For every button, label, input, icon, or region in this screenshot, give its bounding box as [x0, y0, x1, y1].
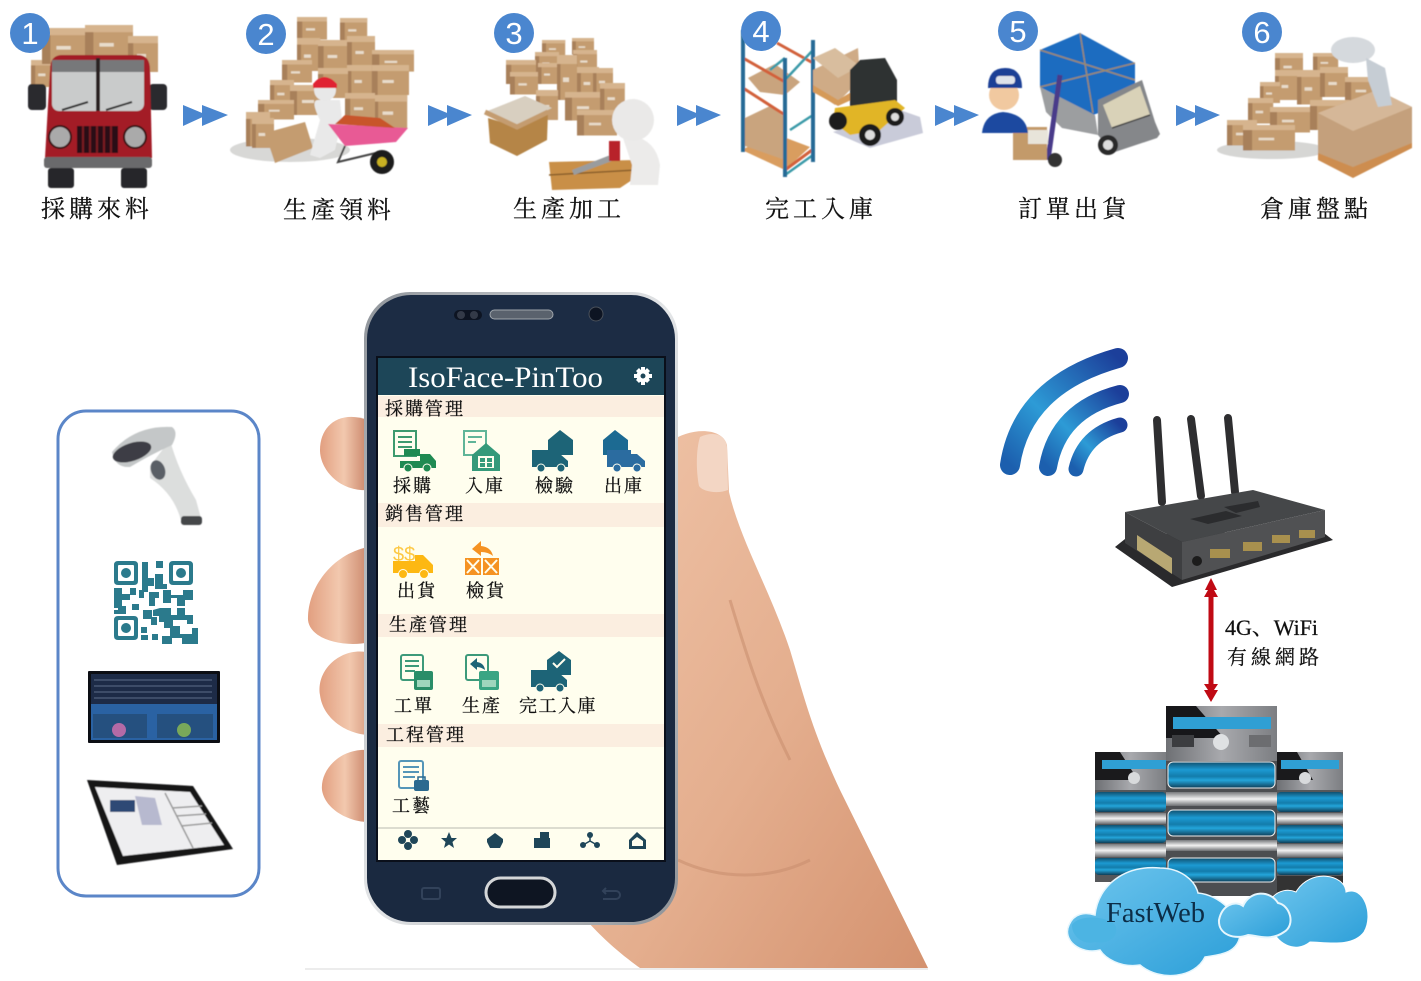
icon: wifi signal [1010, 358, 1120, 469]
section: production: 生產管理 [389, 615, 469, 635]
icon: shipment: $$ [393, 544, 415, 566]
label: 工藝 [392, 796, 432, 816]
section: sales [378, 503, 664, 601]
label: 出庫 [604, 476, 644, 496]
icon: production [466, 655, 499, 690]
nav icon: favourites [441, 832, 457, 848]
label: 採購來料 [41, 196, 153, 223]
icon: warehouse out [603, 430, 645, 472]
palm crease [678, 600, 810, 875]
step 5: order shipping [982, 11, 1160, 223]
step 4: finished goods storage [741, 11, 923, 223]
icon: clouds [1067, 868, 1368, 976]
section: sales: 銷售管理 [385, 504, 465, 524]
arrow [183, 105, 228, 126]
step badge 6: 6 [1253, 15, 1271, 50]
step 6: warehouse stocktaking [1217, 12, 1412, 223]
connection label [1225, 615, 1323, 669]
step badge 1 [10, 13, 50, 53]
ground line [305, 968, 928, 970]
app header: IsoFace-PinToo [408, 361, 603, 394]
cloud label: FastWeb [1106, 897, 1205, 929]
step 3: production processing [485, 13, 660, 223]
nav icon: network [580, 832, 600, 848]
label: 工單 [394, 696, 434, 716]
label: 檢貨 [466, 581, 506, 601]
connection label: 有線網路 [1227, 646, 1323, 669]
icon: returns [465, 541, 499, 575]
arrow [677, 105, 721, 126]
step badge 4: 4 [752, 14, 770, 49]
app header [378, 358, 664, 395]
label: 訂單出貨 [1018, 196, 1130, 223]
icon: worker sawing with boxes [485, 38, 660, 190]
nav icon: basket [487, 833, 503, 848]
arrow [935, 105, 979, 126]
right cloud [1267, 876, 1368, 947]
label: 採購 [393, 476, 433, 496]
label: 生產 [462, 696, 502, 716]
arrow: double-headed link [1204, 578, 1218, 702]
step badge 1: 1 [21, 16, 39, 51]
app screen [378, 358, 664, 860]
step badge 2 [246, 14, 286, 54]
icon: finished goods [531, 651, 571, 692]
step badge 3 [494, 13, 534, 53]
right server [1277, 752, 1343, 894]
bottom navigation [378, 827, 664, 850]
icon: dashboard monitor [88, 671, 220, 743]
arrow [1176, 105, 1220, 126]
label: 完工入庫 [765, 196, 877, 223]
icon: boxes, pallet and scanner [1217, 37, 1412, 178]
left server [1095, 752, 1166, 882]
icon: truck with boxes [28, 25, 167, 188]
section: engineering [378, 724, 664, 816]
label: 完工入庫 [519, 696, 597, 716]
recent and back keys [422, 888, 620, 899]
icon: servers [1095, 706, 1343, 896]
section: purchasing [378, 396, 664, 496]
icon: racking and forklift [742, 30, 923, 177]
step 1: purchasing [10, 13, 167, 223]
icon: process [399, 761, 429, 791]
step 2: production picking [230, 14, 414, 224]
icon: shipment [393, 544, 433, 578]
label: 生產領料 [283, 197, 395, 224]
step badge 5 [998, 11, 1038, 51]
nav icon: register [534, 832, 550, 848]
label: 倉庫盤點 [1260, 196, 1372, 223]
section: purchasing: 採購管理 [385, 399, 465, 419]
small cloud [1219, 894, 1291, 937]
icon: worker with wheelbarrow and boxes [230, 17, 414, 174]
fingers [308, 417, 380, 822]
label: 生產加工 [513, 196, 625, 223]
icon: worker, hand truck and delivery truck [982, 33, 1160, 167]
thumb nail [697, 434, 728, 492]
hand: palm and thumb [588, 431, 928, 968]
section: engineering: 工程管理 [386, 725, 466, 745]
icon: settings gear [634, 367, 652, 385]
icon: wireless gateway [1115, 418, 1333, 587]
icon: barcode scanner [110, 427, 202, 525]
icon: tablet [87, 780, 233, 865]
label: 入庫 [465, 476, 505, 496]
label: 出貨 [397, 581, 437, 601]
connection label: 4G、WiFi [1225, 615, 1318, 640]
icon: warehouse in [464, 431, 500, 471]
icon: work order [401, 655, 433, 690]
illustration: hand holding phone [305, 292, 928, 970]
panel: input devices [58, 411, 259, 896]
nav icon: home [629, 832, 646, 849]
big cloud [1067, 868, 1240, 976]
centre server [1166, 706, 1277, 896]
arrow [428, 105, 472, 126]
icon: purchase [394, 431, 436, 472]
step badge 4 [741, 11, 781, 51]
home button [486, 878, 555, 907]
icon: QR code [114, 561, 198, 644]
step badge 3: 3 [505, 16, 523, 51]
icon: inspection [532, 430, 573, 472]
nav icon: apps [398, 830, 418, 850]
step badge 6 [1242, 12, 1282, 52]
label: 檢驗 [535, 476, 575, 496]
section: production [378, 614, 664, 716]
phone body [364, 292, 678, 925]
step badge 5: 5 [1009, 14, 1027, 49]
step badge 2: 2 [257, 17, 275, 52]
